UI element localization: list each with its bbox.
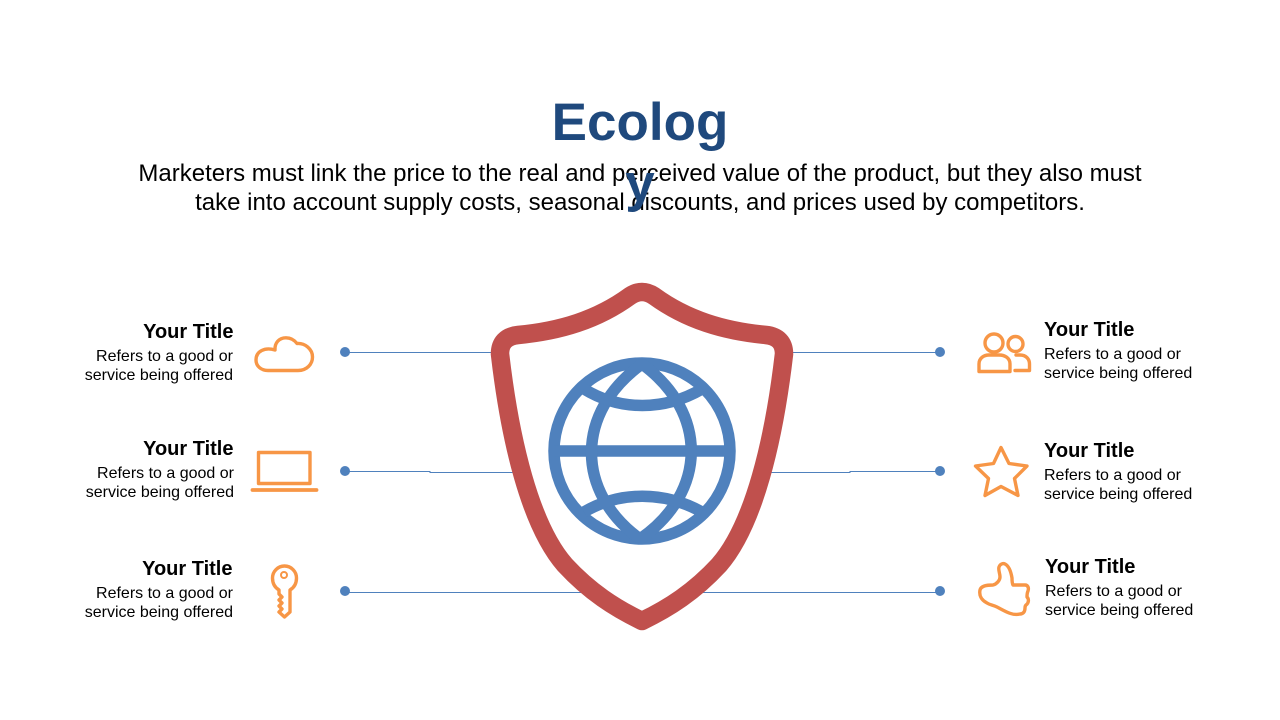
- item: key, bottom left: service being offered: [85, 604, 233, 621]
- item: thumbs up, bottom right: [980, 556, 1193, 619]
- subtitle: take into account supply costs, seasonal discounts, and prices used by competitors.: [195, 189, 1085, 216]
- item: star, middle right: [976, 440, 1192, 503]
- icon: cloud: [256, 338, 312, 370]
- icon: key: [272, 566, 296, 617]
- item: laptop, middle left: service being offered: [86, 484, 234, 501]
- item: key, bottom left: [85, 558, 296, 621]
- item: laptop, middle left: Your Title: [143, 438, 234, 460]
- item: laptop, middle left: Refers to a good or: [97, 465, 235, 482]
- icon: shield: [500, 292, 784, 621]
- icon: users: [979, 334, 1030, 372]
- title: y: [625, 154, 655, 213]
- item: star, middle right: Refers to a good or: [1044, 467, 1182, 484]
- item: cloud, top left: Your Title: [143, 321, 234, 343]
- item: thumbs up, bottom right: Refers to a good or: [1045, 583, 1183, 600]
- item: thumbs up, bottom right: Your Title: [1045, 556, 1135, 578]
- subtitle: Marketers must link the price to the real and perceived value of the product, but they also must: [138, 160, 1142, 187]
- item: users, top right: service being offered: [1044, 365, 1192, 382]
- item: cloud, top left: [85, 321, 312, 384]
- icon: star: [976, 448, 1027, 496]
- item: key, bottom left: Refers to a good or: [96, 585, 234, 602]
- connector lines left: [340, 347, 590, 596]
- item: thumbs up, bottom right: service being offered: [1045, 602, 1193, 619]
- connector lines right: [695, 347, 945, 596]
- icon: globe: [554, 363, 730, 539]
- item: cloud, top left: service being offered: [85, 367, 233, 384]
- item: users, top right: Refers to a good or: [1044, 346, 1182, 363]
- item: key, bottom left: Your Title: [142, 558, 232, 580]
- icon: thumbs up: [980, 564, 1028, 614]
- item: users, top right: Your Title: [1044, 319, 1134, 341]
- title: Ecolog: [552, 93, 728, 152]
- subtitle: [138, 160, 1142, 216]
- item: cloud, top left: Refers to a good or: [96, 348, 234, 365]
- icon: laptop: [252, 452, 316, 490]
- title: [552, 93, 728, 213]
- item: star, middle right: service being offered: [1044, 486, 1192, 503]
- item: laptop, middle left: [86, 438, 316, 501]
- item: star, middle right: Your Title: [1044, 440, 1134, 462]
- item: users, top right: [979, 319, 1192, 382]
